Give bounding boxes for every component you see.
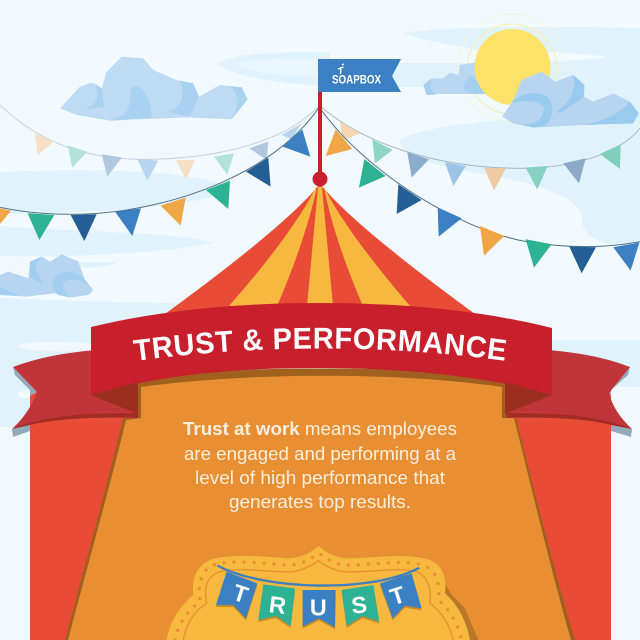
flag: R: R bbox=[268, 591, 288, 619]
cloud: lower left bbox=[0, 254, 93, 298]
cloud: big right bbox=[502, 72, 639, 128]
flag: T bbox=[216, 572, 257, 620]
trust badge bbox=[167, 546, 478, 640]
logo flag bbox=[318, 59, 401, 92]
pole bbox=[318, 90, 322, 182]
flag: S: S bbox=[350, 591, 368, 619]
tent roof bbox=[165, 184, 475, 314]
red curtain bbox=[30, 370, 611, 640]
flag: U: U bbox=[310, 594, 327, 620]
sun disc bbox=[474, 29, 550, 105]
flag: R bbox=[258, 584, 295, 628]
body text: Trust at work means employees bbox=[183, 419, 457, 439]
sky bands bbox=[0, 27, 640, 427]
flag: U bbox=[303, 590, 336, 629]
body text: generates top results. bbox=[229, 492, 411, 512]
sky highlights bbox=[17, 49, 607, 398]
flag: T: T bbox=[230, 579, 251, 608]
orange tent panel bbox=[65, 368, 575, 640]
logo flag: SOAPBOX bbox=[332, 72, 381, 86]
sun bbox=[458, 14, 566, 122]
flag: T right bbox=[380, 573, 422, 620]
main ribbon bbox=[91, 303, 552, 414]
cloud: behind sun bbox=[423, 63, 487, 95]
flag: T right: T bbox=[387, 581, 408, 610]
flag: S bbox=[342, 585, 379, 628]
bunting string bbox=[218, 566, 418, 586]
body text: level of high performance that bbox=[195, 468, 445, 488]
body text: are engaged and performing at a bbox=[184, 444, 457, 464]
faded bunting: left bbox=[0, 105, 318, 181]
ribbon tail: right bbox=[503, 350, 632, 437]
bunting: lower right bbox=[320, 108, 640, 273]
title: TRUST & PERFORMANCE bbox=[132, 328, 506, 361]
ribbon tail: left bbox=[12, 350, 140, 437]
bunting: lower left bbox=[0, 108, 318, 241]
faded bunting: right bbox=[320, 106, 640, 191]
body text bbox=[183, 419, 457, 512]
pole ball bbox=[312, 172, 328, 186]
cloud: upper left bbox=[60, 57, 248, 121]
